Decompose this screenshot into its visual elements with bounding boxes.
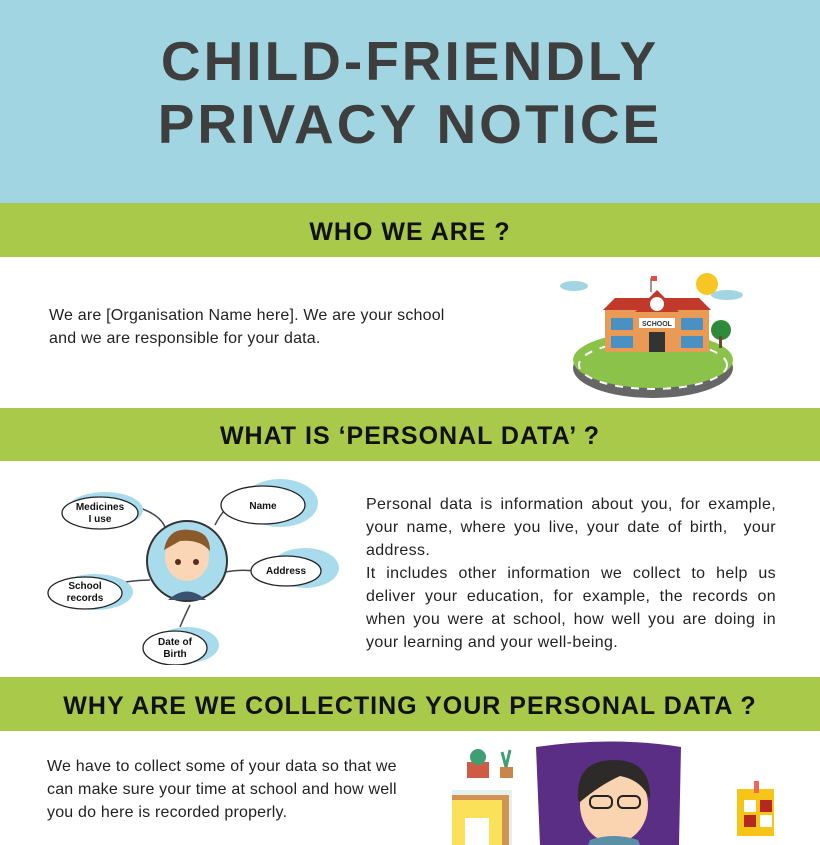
text: who we are: We are [Organisation Name here]. We are your school and we are responsible for your data. bbox=[49, 307, 445, 347]
icon: school on island: SCHOOL bbox=[642, 321, 673, 328]
mind map: I use bbox=[89, 514, 112, 525]
mind map bbox=[47, 479, 339, 665]
mind map: School bbox=[68, 581, 102, 592]
icon: school on island bbox=[560, 273, 743, 398]
heading: who we are bbox=[0, 203, 820, 257]
heading: why collecting bbox=[0, 677, 820, 731]
header bbox=[0, 0, 820, 203]
illustration: child at desk bbox=[452, 742, 774, 845]
mind map: Birth bbox=[163, 649, 187, 660]
title: PRIVACY NOTICE bbox=[158, 93, 662, 155]
heading: personal data: WHAT IS ‘PERSONAL DATA’ ? bbox=[220, 422, 600, 450]
mind map: records bbox=[67, 593, 104, 604]
text: personal data: It includes other information we collect to help us deliver your education, for example, the records on when you were at school, how well you are doing in your learning and your well-being. bbox=[366, 565, 776, 651]
heading: who we are: WHO WE ARE ? bbox=[309, 218, 511, 246]
mind map: Date of bbox=[158, 637, 193, 648]
title: CHILD-FRIENDLY bbox=[161, 30, 659, 92]
mind map: Medicines bbox=[76, 502, 125, 513]
title bbox=[158, 30, 662, 155]
text: personal data bbox=[366, 496, 776, 651]
mind map: Name bbox=[249, 501, 277, 512]
mind map: Address bbox=[266, 566, 306, 577]
text: why: We have to collect some of your data so that we can make sure your time at school and how well you do here is recorded properly. bbox=[47, 758, 397, 821]
text: personal data: Personal data is information about you, for example, your name, where you live, your date of birth, your address. bbox=[366, 496, 776, 559]
heading: personal data bbox=[0, 408, 820, 461]
heading: why collecting: WHY ARE WE COLLECTING YOUR PERSONAL DATA ? bbox=[63, 692, 757, 720]
